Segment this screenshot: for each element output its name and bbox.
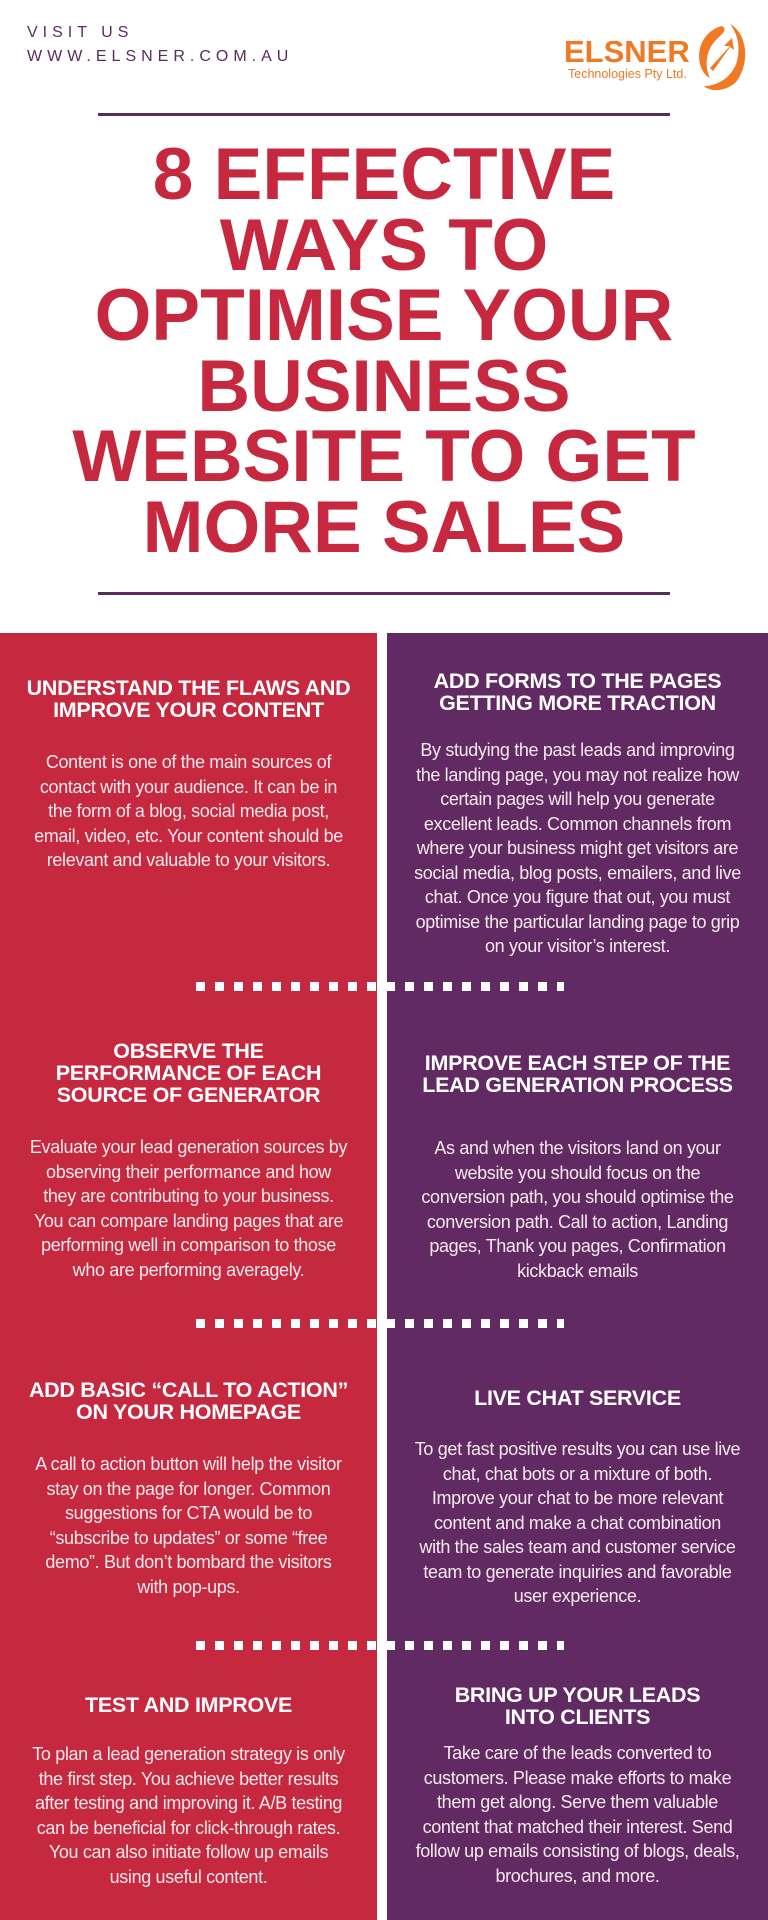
text: improve each step: conversion path, you should optimise the xyxy=(421,1187,734,1207)
heading: leads into clients xyxy=(455,1683,700,1729)
text: add forms: optimise the particular landing page to grip xyxy=(416,912,739,932)
title xyxy=(72,134,696,568)
text: call to action: “subscribe to updates” or some “free xyxy=(50,1528,327,1548)
text: leads into clients: content that matched their interest. Send xyxy=(423,1816,732,1836)
heading: call to action: ON YOUR HOMEPAGE xyxy=(76,1400,301,1424)
title: BUSINESS xyxy=(197,346,571,426)
heading: leads into clients: INTO CLIENTS xyxy=(505,1705,650,1729)
divider dots 3 xyxy=(196,1641,564,1650)
text: content: Content is one of the main sources of xyxy=(46,752,331,772)
heading: call to action: ADD BASIC “CALL TO ACTION” xyxy=(29,1378,348,1402)
text: improve each step xyxy=(421,1138,734,1280)
text: live chat: Improve your chat to be more relevant xyxy=(432,1488,723,1508)
text: leads into clients: Take care of the leads converted to xyxy=(444,1743,711,1763)
text: test and improve: You can also initiate follow up emails xyxy=(49,1842,328,1862)
bottom rule xyxy=(98,592,670,595)
heading: observe performance xyxy=(56,1039,321,1107)
text: add forms: certain pages will help you generate xyxy=(440,789,715,809)
heading: leads into clients: BRING UP YOUR LEADS xyxy=(455,1683,700,1707)
text: add forms xyxy=(414,740,741,956)
text: test and improve: can be beneficial for click-through rates. xyxy=(37,1818,340,1838)
text: content: relevant and valuable to your visitors. xyxy=(47,850,330,870)
heading: understand the flaws: IMPROVE YOUR CONTENT xyxy=(53,698,324,722)
text: add forms: By studying the past leads and improving xyxy=(420,740,735,760)
text: content xyxy=(34,752,343,870)
text: live chat: team to generate inquiries and favorable xyxy=(423,1562,732,1582)
heading: observe performance: SOURCE OF GENERATOR xyxy=(57,1083,320,1107)
heading: add forms: GETTING MORE TRACTION xyxy=(439,691,716,715)
text: observe: Evaluate your lead generation sources by xyxy=(30,1137,347,1157)
text: add forms: chat. Once you figure that out, you must xyxy=(425,887,730,907)
text: test and improve: the first step. You achieve better results xyxy=(39,1768,338,1788)
text: add forms: on your visitor’s interest. xyxy=(485,936,670,956)
text: improve each step: conversion path. Call to action, Landing xyxy=(427,1212,728,1232)
logo: Technologies Pty Ltd. xyxy=(568,67,687,81)
heading: understand the flaws: UNDERSTAND THE FLAWS AND xyxy=(27,676,350,700)
text: live chat xyxy=(415,1439,740,1606)
heading: call to action xyxy=(29,1378,348,1424)
text: leads into clients: brochures, and more. xyxy=(495,1866,660,1886)
top rule xyxy=(98,113,670,116)
text: content: email, video, etc. Your content should be xyxy=(34,826,343,846)
panel: left red column xyxy=(0,633,377,1920)
text: observe: You can compare landing pages that are xyxy=(34,1210,343,1230)
text: call to action: with pop-ups. xyxy=(137,1576,240,1596)
text: call to action: suggestions for CTA would be to xyxy=(65,1503,312,1523)
text: live chat: user experience. xyxy=(514,1586,641,1606)
logo xyxy=(564,24,746,90)
text: leads into clients: follow up emails consisting of blogs, deals, xyxy=(416,1841,739,1861)
text: observe: performing well in comparison to those xyxy=(41,1235,336,1255)
text: observe: who are performing averagely. xyxy=(73,1260,304,1280)
text: add forms: excellent leads. Common channels from xyxy=(424,814,731,834)
title: 8 EFFECTIVE xyxy=(153,134,615,215)
panel: right purple column xyxy=(387,633,768,1920)
heading: observe performance: OBSERVE THE xyxy=(113,1039,264,1063)
text: improve each step: website you should focus on the xyxy=(455,1162,700,1182)
divider dots 1 xyxy=(196,982,564,991)
text: call to action: demo”. But don’t bombard the visitors xyxy=(45,1552,332,1572)
title: OPTIMISE YOUR xyxy=(95,275,673,356)
text: add forms: social media, blog posts, emailers, and live xyxy=(414,862,741,882)
divider dots 2 xyxy=(196,1319,564,1328)
text: test and improve: after testing and improving it. A/B testing xyxy=(35,1793,342,1813)
title: MORE SALES xyxy=(143,486,625,568)
text: observe: they are contributing to your business. xyxy=(43,1186,334,1206)
text: improve each step: kickback emails xyxy=(517,1260,638,1280)
text: add forms: where your business might get visitors are xyxy=(417,838,738,858)
heading: improve each step: LEAD GENERATION PROCESS xyxy=(422,1073,733,1097)
text: live chat: content and make a chat combination xyxy=(434,1512,721,1532)
text: content: contact with your audience. It can be in xyxy=(40,776,337,796)
heading: test and improve: TEST AND IMPROVE xyxy=(85,1693,292,1717)
text: test and improve xyxy=(32,1744,346,1887)
text: improve each step: As and when the visitors land on your xyxy=(434,1138,721,1158)
header: visit us: VISIT US xyxy=(27,24,133,41)
text: improve each step: pages, Thank you pages, Confirmation xyxy=(429,1236,726,1256)
text: observe xyxy=(30,1137,348,1280)
text: test and improve: To plan a lead generation strategy is only xyxy=(32,1744,345,1764)
heading: add forms xyxy=(434,669,721,715)
text: test and improve: using useful content. xyxy=(110,1866,267,1886)
heading: add forms: ADD FORMS TO THE PAGES xyxy=(434,669,721,693)
heading: improve each step: IMPROVE EACH STEP OF THE xyxy=(425,1051,730,1075)
text: leads into clients: customers. Please make efforts to make xyxy=(424,1768,731,1788)
header: visit us: WWW.ELSNER.COM.AU xyxy=(27,48,293,65)
text: add forms: the landing page, you may not realize how xyxy=(416,764,739,784)
text: call to action: A call to action button will help the visitor xyxy=(35,1454,342,1474)
logo: ELSNER xyxy=(564,34,690,69)
text: live chat: with the sales team and customer service xyxy=(419,1537,736,1557)
text: call to action: stay on the page for longer. Common xyxy=(47,1478,330,1498)
text: leads into clients xyxy=(416,1743,739,1886)
heading: improve each step xyxy=(422,1051,733,1097)
header: visit us xyxy=(27,24,293,65)
heading: observe performance: PERFORMANCE OF EACH xyxy=(56,1061,321,1085)
text: observe: observing their performance and how xyxy=(46,1162,331,1182)
text: live chat: To get fast positive results you can use live xyxy=(415,1439,740,1459)
text: content: the form of a blog, social media post, xyxy=(48,801,329,821)
heading: understand the flaws xyxy=(27,676,350,722)
text: call to action xyxy=(35,1454,342,1597)
text: leads into clients: them get along. Serve them valuable xyxy=(437,1792,718,1812)
title: WAYS TO xyxy=(220,204,548,286)
heading: live chat: LIVE CHAT SERVICE xyxy=(474,1386,681,1410)
title: WEBSITE TO GET xyxy=(72,416,696,497)
text: live chat: chat, chat bots or a mixture of both. xyxy=(443,1464,712,1484)
